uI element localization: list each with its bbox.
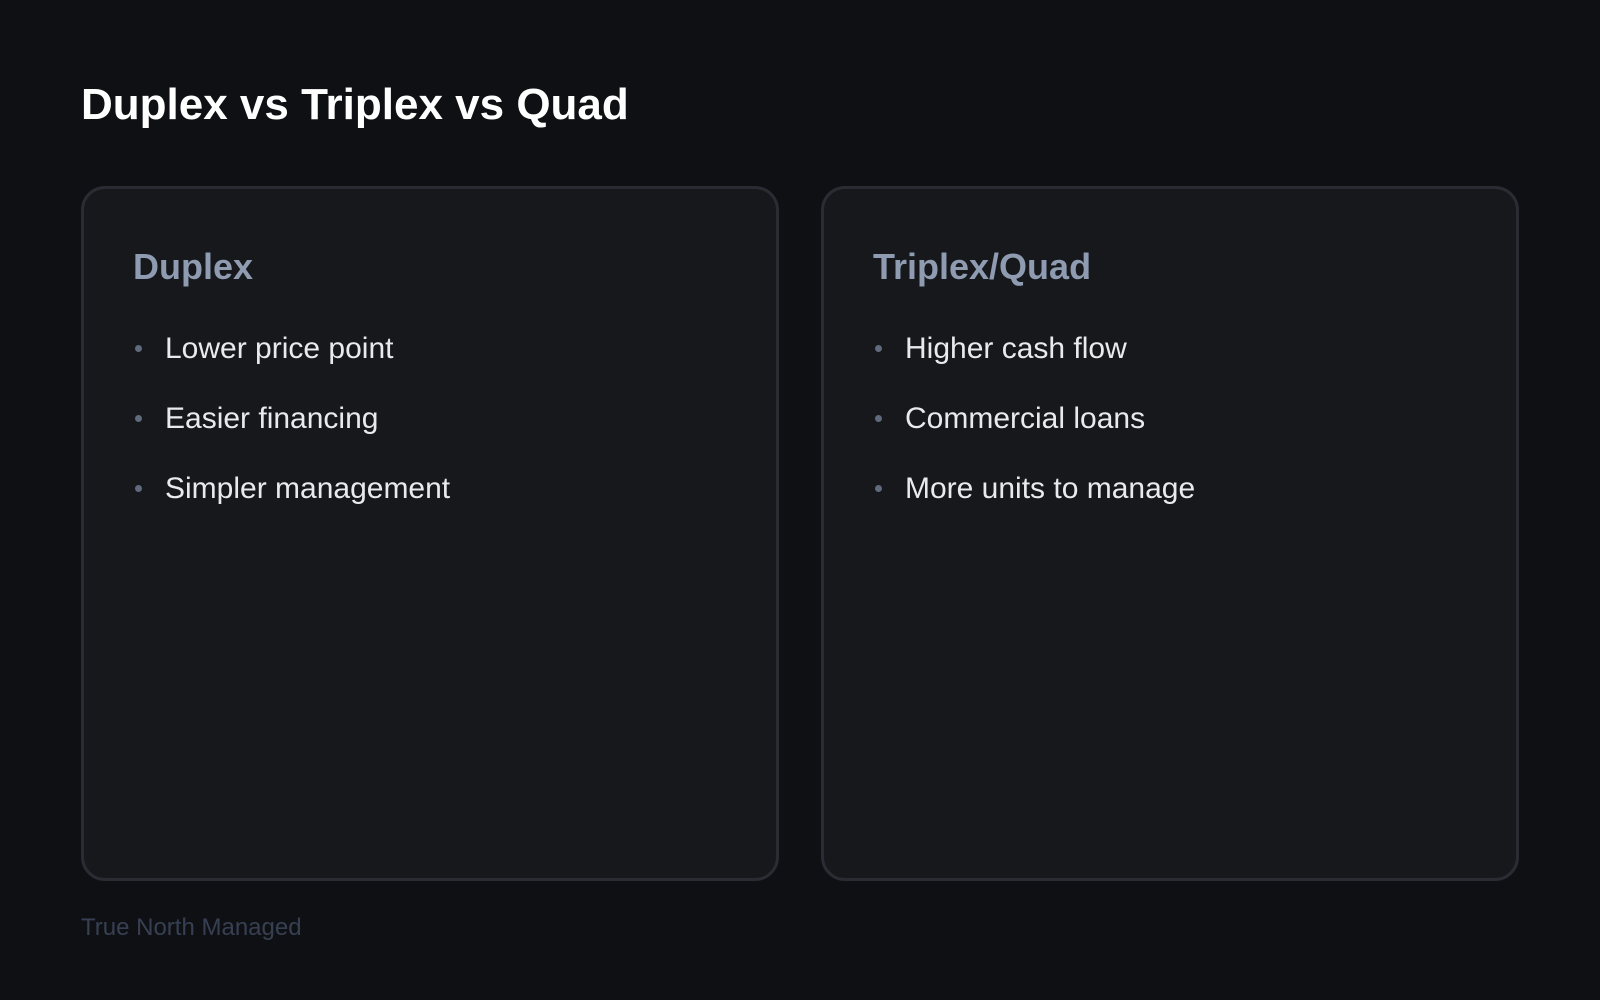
list: triplex/quad points: [875, 332, 1195, 505]
heading: triplex/quad: Triplex/Quad: [873, 246, 1091, 287]
bullet: commercial loans: Commercial loans: [905, 402, 1145, 435]
bullet: more units: More units to manage: [905, 472, 1195, 505]
list: duplex points: [135, 332, 450, 505]
bullet: lower price point: Lower price point: [165, 332, 393, 365]
panel: duplex: [81, 186, 779, 881]
panel: triplex/quad: [821, 186, 1519, 881]
heading: duplex: Duplex: [133, 246, 253, 287]
bullet: higher cash flow: Higher cash flow: [905, 332, 1127, 365]
footer: True North Managed: [81, 914, 302, 941]
bullet: simpler management: Simpler management: [165, 472, 450, 505]
bullet: easier financing: Easier financing: [165, 402, 378, 435]
title: Duplex vs Triplex vs Quad: [81, 80, 629, 129]
